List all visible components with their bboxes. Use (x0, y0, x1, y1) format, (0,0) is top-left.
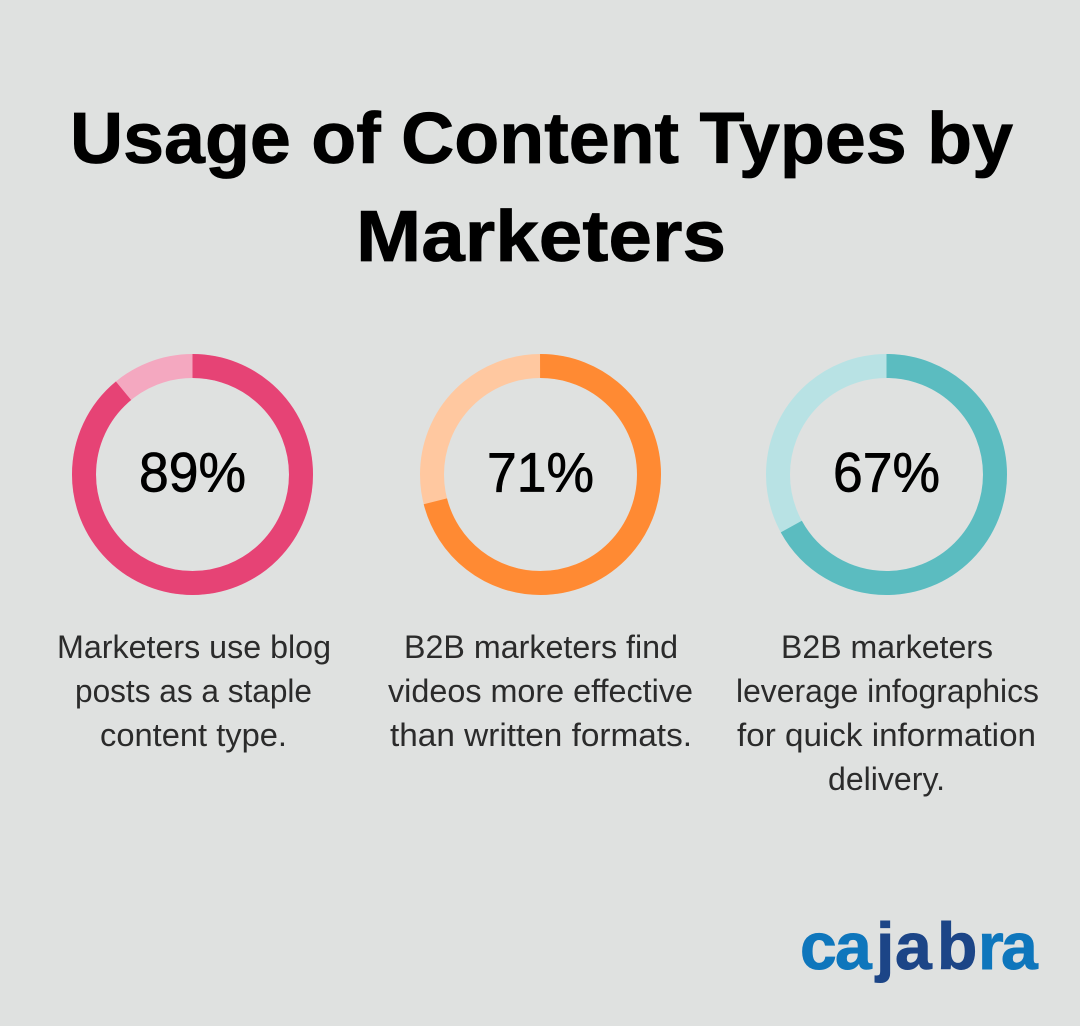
donut chart: 71% (432, 366, 649, 583)
panel: blog posts 89% (57, 366, 331, 753)
value: 89%: 89% (139, 440, 246, 504)
logo: cajabra: j (874, 909, 894, 983)
description: infographics: for quick information (737, 717, 1036, 753)
title: Usage of Content Types by (70, 99, 1013, 179)
value: 71%: 71% (487, 440, 594, 504)
logo: cajabra: a (895, 909, 933, 983)
description: infographics: leverage infographics (736, 673, 1039, 709)
description: videos: videos more effective (388, 673, 693, 709)
donut chart: 89% (84, 366, 301, 583)
logo: cajabra: b (937, 909, 977, 983)
description: videos: than written formats. (390, 717, 692, 753)
donut chart: 67% (778, 366, 995, 583)
description: blog posts: content type. (100, 717, 287, 753)
description: infographics (736, 629, 1039, 797)
title (70, 99, 1013, 277)
description: blog posts (57, 629, 331, 753)
description: videos: B2B marketers find (404, 629, 678, 665)
description: infographics: B2B marketers (781, 629, 993, 665)
panel: videos 71% (388, 366, 693, 753)
description: blog posts: posts as a staple (75, 673, 312, 709)
logo: cajabra: a (1001, 909, 1039, 983)
title: Marketers (356, 197, 726, 277)
value: 67%: 67% (833, 440, 940, 504)
description: infographics: delivery. (828, 761, 945, 797)
logo: cajabra: a (835, 909, 873, 983)
description: videos (388, 629, 693, 753)
logo: cajabra: c (800, 909, 837, 983)
description: blog posts: Marketers use blog (57, 629, 331, 665)
panel: infographics 67% (736, 366, 1039, 797)
logo: cajabra: r (978, 909, 1004, 983)
